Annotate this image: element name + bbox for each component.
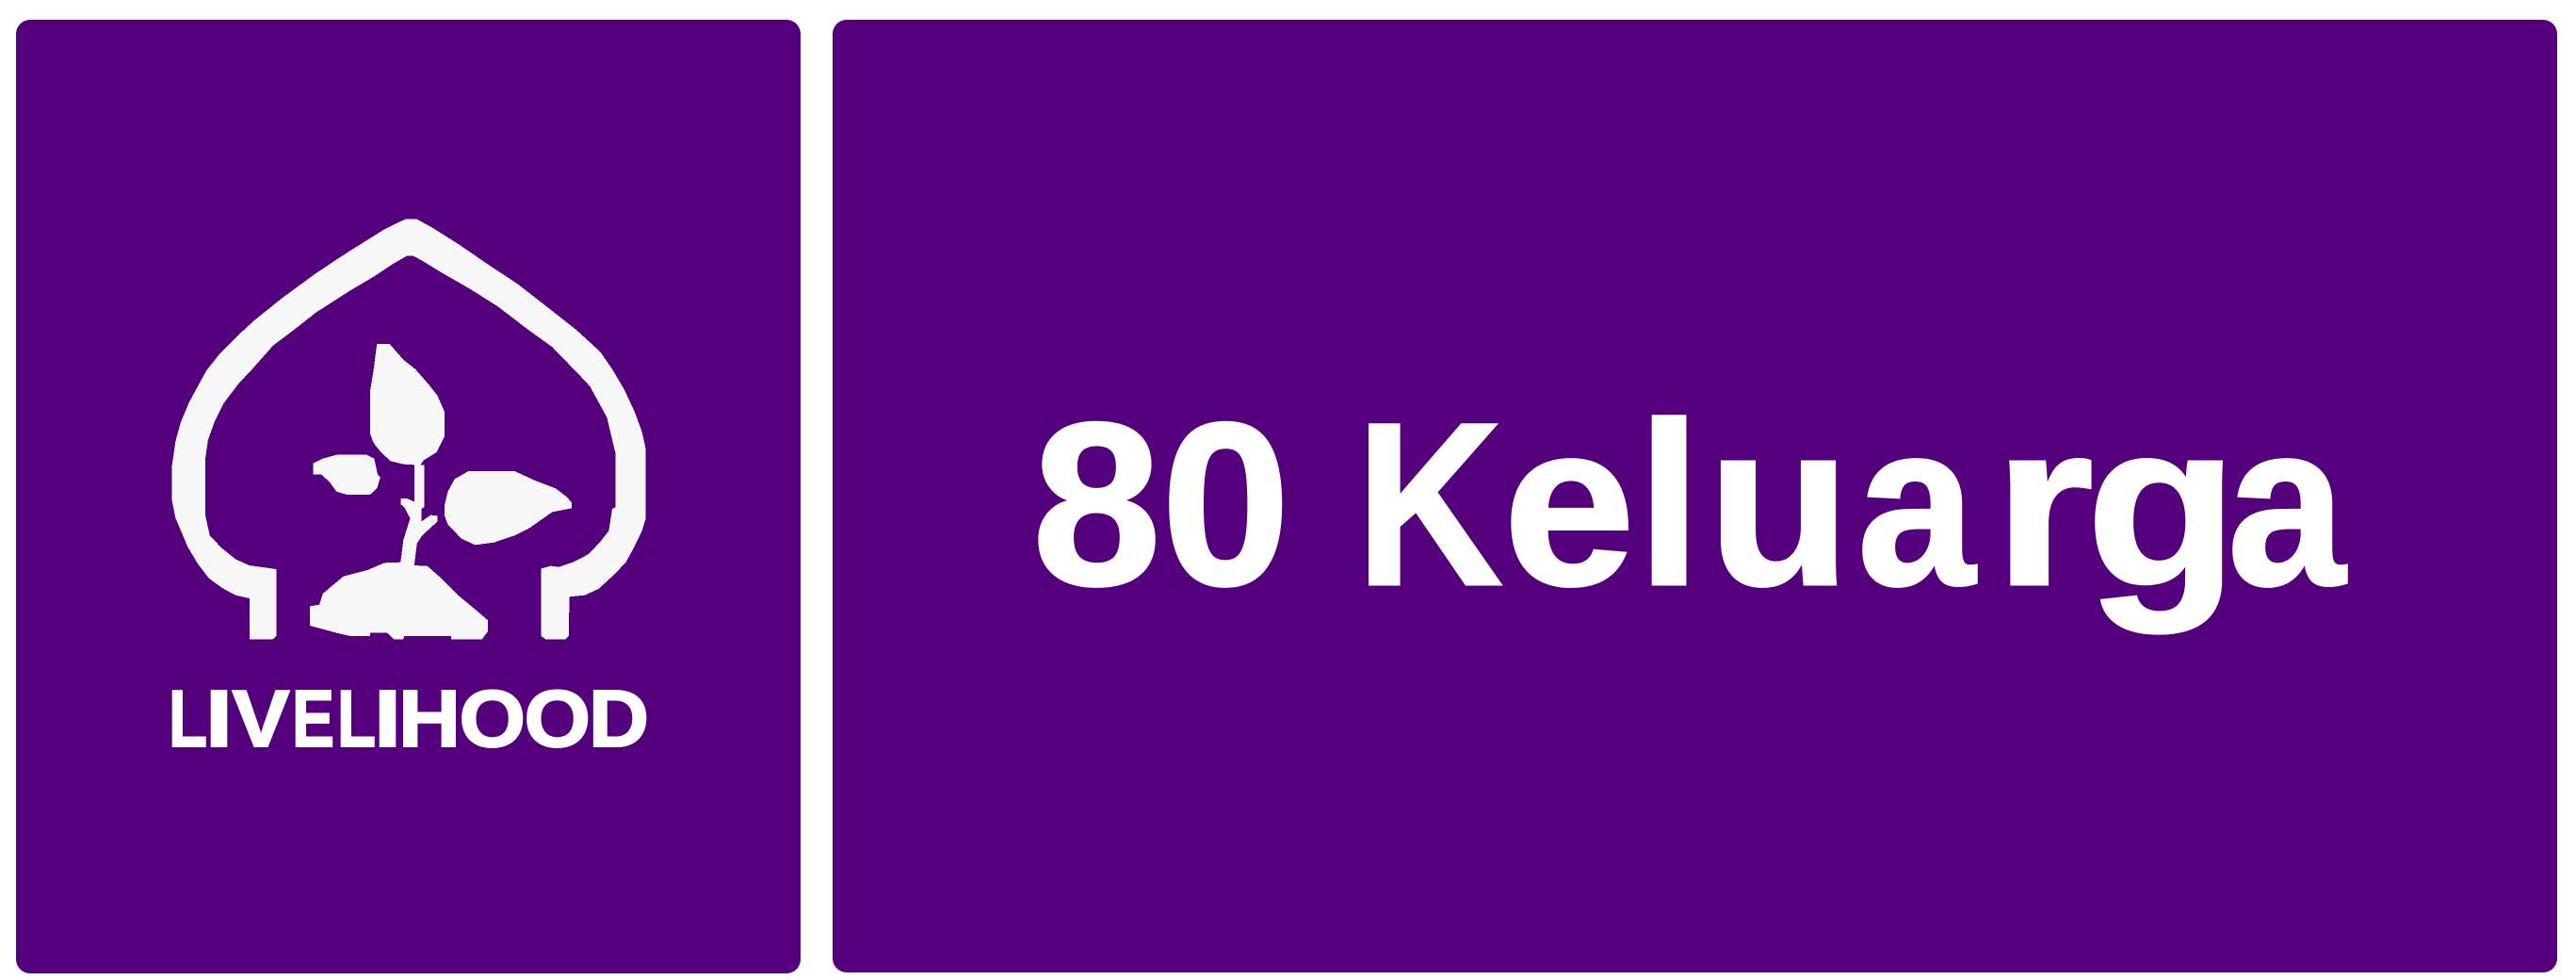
logo wordmark: L [337,675,376,764]
logo wordmark: O [460,675,526,764]
panel: livelihood logo [16,20,801,973]
logo wordmark: O [524,675,591,764]
logo wordmark: I [205,675,233,764]
stat: 80 Keluarga: 0 [1161,375,1290,634]
icon: top leaf, stem and soil mound [310,344,488,639]
panel: household count [833,20,2557,972]
icon: large right leaf [445,471,572,545]
icon: house outline [172,220,646,639]
stat: 80 Keluarga: a [2228,375,2347,634]
logo wordmark: I [374,675,401,764]
logo wordmark: E [292,675,334,764]
stat: 80 Keluarga: e [1503,375,1635,634]
icon: small left leaf [314,455,381,495]
stat: 80 Keluarga: K [1356,375,1502,634]
stat: 80 Keluarga: r [1994,375,2094,634]
logo wordmark: D [589,675,649,764]
stat: 80 Keluarga: u [1708,375,1851,634]
stat: 80 Keluarga: l [1637,375,1701,634]
stat: 80 Keluarga: a [1857,375,1977,634]
icon: sprout inside house outline [172,220,646,639]
stat: 80 Keluarga: 8 [1032,375,1161,634]
logo wordmark: L [169,675,207,764]
logo wordmark: V [232,675,290,764]
logo wordmark: H [398,675,461,764]
stat: 80 Keluarga: g [2086,375,2238,634]
